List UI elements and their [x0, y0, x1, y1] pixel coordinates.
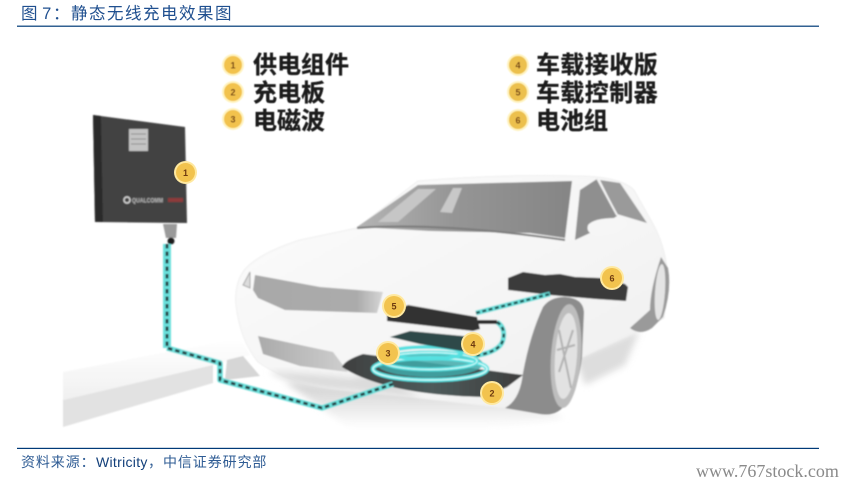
- charging pad: [342, 354, 523, 397]
- badge 1 on charger: 1: [183, 168, 188, 178]
- title: ：: [53, 5, 70, 23]
- source note: Witricity: [96, 454, 148, 470]
- legend item 1: 供电组件: [253, 52, 349, 79]
- front grille upper: [253, 275, 383, 313]
- badge 5 on controller: 5: [391, 302, 397, 312]
- side windows: [575, 178, 647, 240]
- ground and curb: [63, 330, 640, 428]
- legend item 3: [222, 108, 325, 135]
- watermark: www.767stock.com: [696, 461, 839, 481]
- windshield: [357, 181, 572, 238]
- badge 2 on pad: [480, 381, 504, 405]
- title: 图 7: [21, 5, 51, 23]
- legend item 3: 3: [230, 114, 236, 124]
- front grille lower: [258, 336, 348, 372]
- legend item 5: 车载控制器: [536, 80, 658, 107]
- source note: 中信证券研究部: [163, 454, 267, 470]
- illustration: wireless charging scene: [63, 115, 669, 428]
- cable: controller to receiver: [474, 322, 504, 356]
- title: 静态无线充电效果图: [71, 4, 233, 23]
- legend item 6: 电池组: [536, 108, 608, 135]
- legend item 5: 5: [515, 88, 521, 98]
- cable: charger to charging pad: [167, 244, 393, 408]
- side mirror: [588, 218, 627, 235]
- badge 4 on receiver: [461, 332, 485, 356]
- charger wall unit: [93, 115, 187, 244]
- car body: [236, 176, 668, 408]
- front wheel: [505, 297, 585, 415]
- legend item 2: 2: [230, 88, 236, 98]
- legend item 6: 6: [515, 116, 521, 126]
- legend item 2: 充电板: [253, 80, 325, 107]
- badge 1 on charger: [174, 161, 197, 184]
- badge 6 on battery: 6: [609, 274, 615, 284]
- vehicle controller: [387, 305, 480, 331]
- badge 6 on battery: [600, 266, 624, 290]
- source note: 资料来源：: [21, 454, 96, 470]
- badge 5 on controller: [382, 294, 406, 318]
- legend item 2: [222, 80, 325, 107]
- battery pack: [508, 272, 628, 301]
- badge 3 on coils: 3: [385, 348, 391, 358]
- charger wall unit: QUALCOMM: [132, 198, 163, 204]
- cable: controller to battery: [476, 294, 550, 313]
- source note: ，: [148, 454, 163, 470]
- source note: [21, 454, 267, 470]
- legend item 4: 4: [515, 60, 521, 70]
- badge 2 on pad: 2: [489, 388, 495, 398]
- legend item 1: 1: [230, 60, 236, 70]
- badge 4 on receiver: 4: [470, 340, 476, 350]
- badge 3 on coils: [376, 341, 400, 365]
- headlight: [243, 272, 250, 288]
- rear wheel: [630, 257, 669, 332]
- vehicle receiver plate: [390, 331, 473, 352]
- legend item 4: 车载接收版: [536, 52, 658, 79]
- legend item 3: 电磁波: [253, 108, 325, 135]
- electromagnetic coils: [373, 347, 487, 380]
- legend: [222, 52, 658, 135]
